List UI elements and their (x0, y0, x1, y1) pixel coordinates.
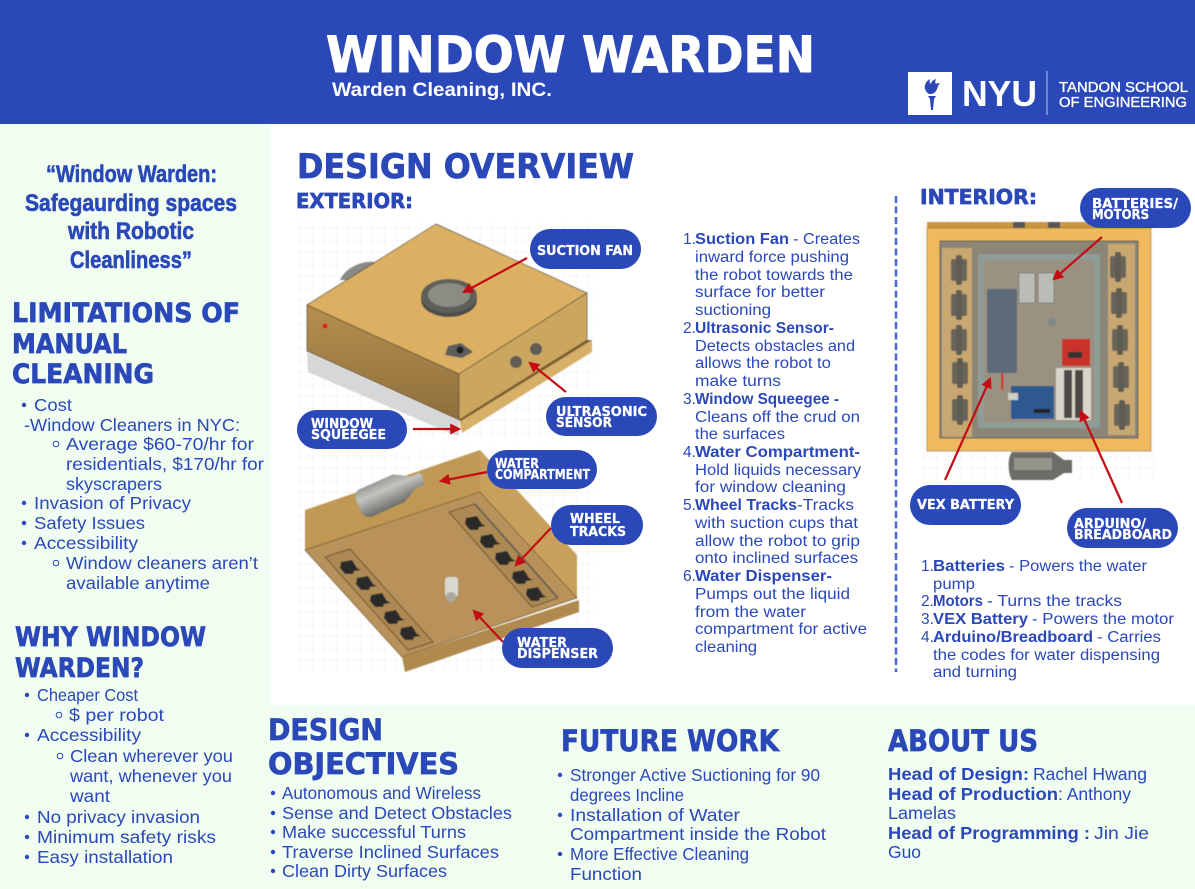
text block: future work list: degrees Incline (570, 785, 684, 805)
callout: wheel tracks: TRACKS (570, 525, 626, 540)
text block: exterior numbered list: with suction cups that (694, 515, 859, 532)
text block: exterior numbered list: Water Compartment- (695, 444, 860, 461)
tagline quote: “Window Warden: (46, 161, 217, 188)
text block: exterior numbered list: the robot towards the (695, 267, 853, 284)
heading: about us: ABOUT US (888, 724, 1038, 758)
callout: water dispenser: DISPENSER (517, 647, 598, 662)
text block: limitations list: Window cleaners aren’t (66, 553, 258, 573)
text block: team credits (888, 764, 1149, 862)
text block: interior numbered list: - Carries (1097, 629, 1161, 646)
text block: interior numbered list: pump (933, 576, 975, 593)
text block: exterior numbered list: Ultrasonic Sensor- (695, 320, 834, 337)
callout: arduino and breadboard (1067, 412, 1178, 548)
callout: window squeegee: SQUEEGEE (311, 428, 386, 443)
text block: limitations list: Cost (34, 395, 72, 415)
text block: exterior numbered list: Hold liquids necessary (695, 462, 861, 479)
text block: limitations list: skyscrapers (66, 474, 162, 494)
text block: exterior numbered list: compartment for active (695, 621, 867, 638)
text block: exterior numbered list: allows the robot to (695, 355, 831, 372)
tagline quote: Safegaurding spaces (25, 190, 237, 217)
text block: exterior numbered list: from the water (695, 604, 806, 621)
callout: suction fan: SUCTION FAN (537, 244, 633, 259)
header banner (0, 0, 1195, 124)
text block: why window warden list: No privacy invasion (37, 807, 200, 827)
callout: suction fan (464, 229, 641, 292)
callout: water compartment: WATER (495, 457, 539, 472)
text block: team credits: Head of Production (888, 784, 1058, 804)
text block: exterior numbered list: Wheel Tracks (695, 497, 797, 514)
text block: interior numbered list: Arduino/Breadboard (933, 629, 1093, 646)
heading: limitations of manual cleaning: LIMITATIONS OF (12, 298, 240, 329)
NYU Tandon logo: NYU (962, 73, 1037, 114)
text block: interior numbered list: Motors (933, 593, 983, 610)
text block: interior numbered list: 1. (921, 558, 934, 575)
text block: team credits: Lamelas (888, 803, 956, 823)
text block: future work list: More Effective Cleaning (570, 844, 749, 864)
text block: future work list: Compartment inside the Robot (570, 824, 826, 844)
text block: team credits: Head of Design: (888, 764, 1029, 784)
vertical dashed divider (895, 196, 897, 672)
heading: design objectives: DESIGN (268, 713, 383, 747)
tagline quote (25, 161, 237, 274)
text block: why window warden list: $ per robot (69, 705, 164, 725)
text block: future work list: Stronger Active Suctioning for 90 (570, 765, 820, 785)
text block: exterior numbered list: the surfaces (695, 426, 785, 443)
text block: why window warden list: want, whenever you (69, 766, 232, 786)
text block: interior numbered list: - Turns the tracks (987, 593, 1122, 610)
text block: interior numbered list: 3. (921, 611, 934, 628)
callout: ultrasonic sensor: ULTRASONIC (556, 405, 647, 420)
tagline quote: Cleanliness” (70, 247, 192, 274)
text block: interior numbered list: and turning (933, 664, 1017, 681)
text block: exterior numbered list: cleaning (695, 639, 757, 656)
text block: future work list (558, 765, 826, 884)
text block: exterior numbered list: - Creates (793, 231, 860, 248)
text block: exterior numbered list: Cleans off the crud on (695, 409, 860, 426)
heading: design overview: DESIGN OVERVIEW (297, 147, 634, 187)
subtitle: Warden Cleaning, INC. (332, 80, 552, 101)
text block: why window warden list: want (69, 786, 110, 806)
NYU Tandon logo (908, 71, 1188, 115)
text block: design objectives list: Make successful Turns (282, 822, 466, 842)
heading: interior: INTERIOR: (920, 185, 1037, 209)
callout: ultrasonic sensor: SENSOR (556, 416, 612, 431)
heading: limitations of manual cleaning: MANUAL (12, 329, 127, 360)
heading: why window warden (15, 622, 206, 684)
text block: why window warden list: Easy installation (37, 847, 173, 867)
text block: limitations list: Safety Issues (34, 513, 145, 533)
text block: exterior numbered list: 5. (683, 497, 696, 514)
text block: exterior numbered list: 2. (683, 320, 696, 337)
text block: limitations list: Accessibility (34, 533, 138, 553)
text block: team credits: Guo (888, 842, 921, 862)
text block: interior numbered list: Batteries (933, 558, 1005, 575)
diagram: exterior underside view of robot (295, 450, 595, 672)
text block: exterior numbered list: suctioning (695, 302, 771, 319)
text block: exterior numbered list: Water Dispenser- (695, 568, 832, 585)
text block: exterior numbered list: 1. (683, 231, 696, 248)
text block: future work list: Installation of Water (570, 805, 740, 825)
callout: water compartment: COMPARTMENT (495, 468, 590, 483)
text block: limitations list: Average $60-70/hr for (66, 434, 254, 454)
callout: vex battery (910, 379, 1021, 525)
tagline quote: with Robotic (67, 218, 194, 245)
callout: water compartment (441, 450, 597, 489)
text block: why window warden list: Minimum safety risks (37, 827, 216, 847)
panel: left column background (0, 124, 271, 889)
callout: arduino and breadboard: ARDUINO/ (1074, 517, 1146, 532)
callout: batteries and motors (1054, 188, 1191, 279)
callout: vex battery: VEX BATTERY (917, 498, 1015, 513)
text block: limitations list: available anytime (66, 573, 210, 593)
text block: exterior numbered list: inward force pushing (695, 249, 849, 266)
text block: design objectives list: Sense and Detect Obstacles (282, 803, 512, 823)
heading: limitations of manual cleaning: CLEANING (12, 359, 154, 390)
callout: batteries and motors: BATTERIES/ (1092, 197, 1178, 212)
text block: team credits: Head of Programming : (888, 823, 1090, 843)
text block: future work list: Function (570, 864, 642, 884)
text block: why window warden list: Clean wherever you (70, 746, 233, 766)
text block: interior numbered list: 4. (921, 629, 934, 646)
text block: design objectives list: Clean Dirty Surfaces (282, 861, 447, 881)
NYU Tandon logo: TANDON SCHOOL (1059, 80, 1188, 96)
NYU Tandon logo: OF ENGINEERING (1059, 95, 1187, 111)
heading: exterior: EXTERIOR: (296, 189, 413, 213)
text block: team credits: : Anthony (1058, 784, 1131, 804)
callout: water dispenser: WATER (517, 636, 567, 651)
text block: interior numbered list: 2. (921, 593, 934, 610)
callout: batteries and motors: MOTORS (1092, 208, 1149, 223)
text block: interior numbered list: - Powers the motor (1032, 611, 1174, 628)
text block: design objectives list: Autonomous and Wireless (282, 783, 481, 803)
text block: design objectives list: Traverse Inclined Surfaces (282, 842, 499, 862)
text block: exterior numbered list: 4. (683, 444, 696, 461)
text block: why window warden list (25, 685, 233, 867)
heading: limitations of manual cleaning (12, 298, 240, 390)
callout: wheel tracks: WHEEL (570, 512, 620, 527)
text block: why window warden list: Accessibility (37, 725, 141, 745)
text block: limitations list: Invasion of Privacy (34, 493, 191, 513)
title: WINDOW WARDEN (326, 26, 815, 84)
text block: exterior numbered list: Pumps out the liquid (695, 586, 850, 603)
panel: bottom band background (0, 705, 1195, 889)
text block: limitations list: residentials, $170/hr for (66, 454, 264, 474)
text block: exterior numbered list: Window Squeegee - (695, 391, 839, 408)
callout: wheel tracks (516, 505, 643, 565)
text block: team credits: Rachel Hwang (1033, 764, 1147, 784)
text block: exterior numbered list (683, 231, 867, 656)
callout: arduino and breadboard: BREADBOARD (1074, 528, 1172, 543)
text block: interior numbered list (921, 558, 1174, 681)
heading: design objectives: OBJECTIVES (268, 747, 459, 781)
callout: water dispenser (474, 611, 613, 668)
text block: interior numbered list: VEX Battery (933, 611, 1028, 628)
text block: exterior numbered list: 3. (683, 391, 696, 408)
callout: ultrasonic sensor (530, 363, 657, 436)
text block: exterior numbered list: make turns (695, 373, 781, 390)
heading: why window warden: WARDEN? (15, 653, 144, 684)
text block: exterior numbered list: for window cleaning (695, 479, 846, 496)
diagram: exterior top view of robot (295, 222, 595, 442)
text block: exterior numbered list: 6. (683, 568, 696, 585)
text block: exterior numbered list: surface for better (695, 284, 825, 301)
text block: limitations list (22, 395, 264, 593)
text block: exterior numbered list: onto inclined surfaces (695, 550, 858, 567)
text block: exterior numbered list: Suction Fan (695, 231, 789, 248)
heading: future work: FUTURE WORK (561, 724, 780, 758)
text block: why window warden list: Cheaper Cost (37, 685, 138, 705)
text block: interior numbered list: the codes for water dispensing (933, 647, 1160, 664)
text block: exterior numbered list: -Tracks (797, 497, 854, 514)
diagram: interior plan view of robot (920, 215, 1157, 480)
text block: limitations list: -Window Cleaners in NYC: (24, 415, 240, 435)
text block: exterior numbered list: Detects obstacles and (695, 338, 855, 355)
callout: window squeegee (297, 410, 459, 449)
callout: window squeegee: WINDOW (311, 417, 373, 432)
text block: interior numbered list: - Powers the water (1009, 558, 1147, 575)
text block: design objectives list (271, 783, 512, 881)
heading: why window warden: WHY WINDOW (15, 622, 206, 653)
text block: team credits: Jin Jie (1094, 823, 1149, 843)
heading: design objectives (268, 713, 459, 781)
text block: exterior numbered list: allow the robot to grip (695, 533, 860, 550)
